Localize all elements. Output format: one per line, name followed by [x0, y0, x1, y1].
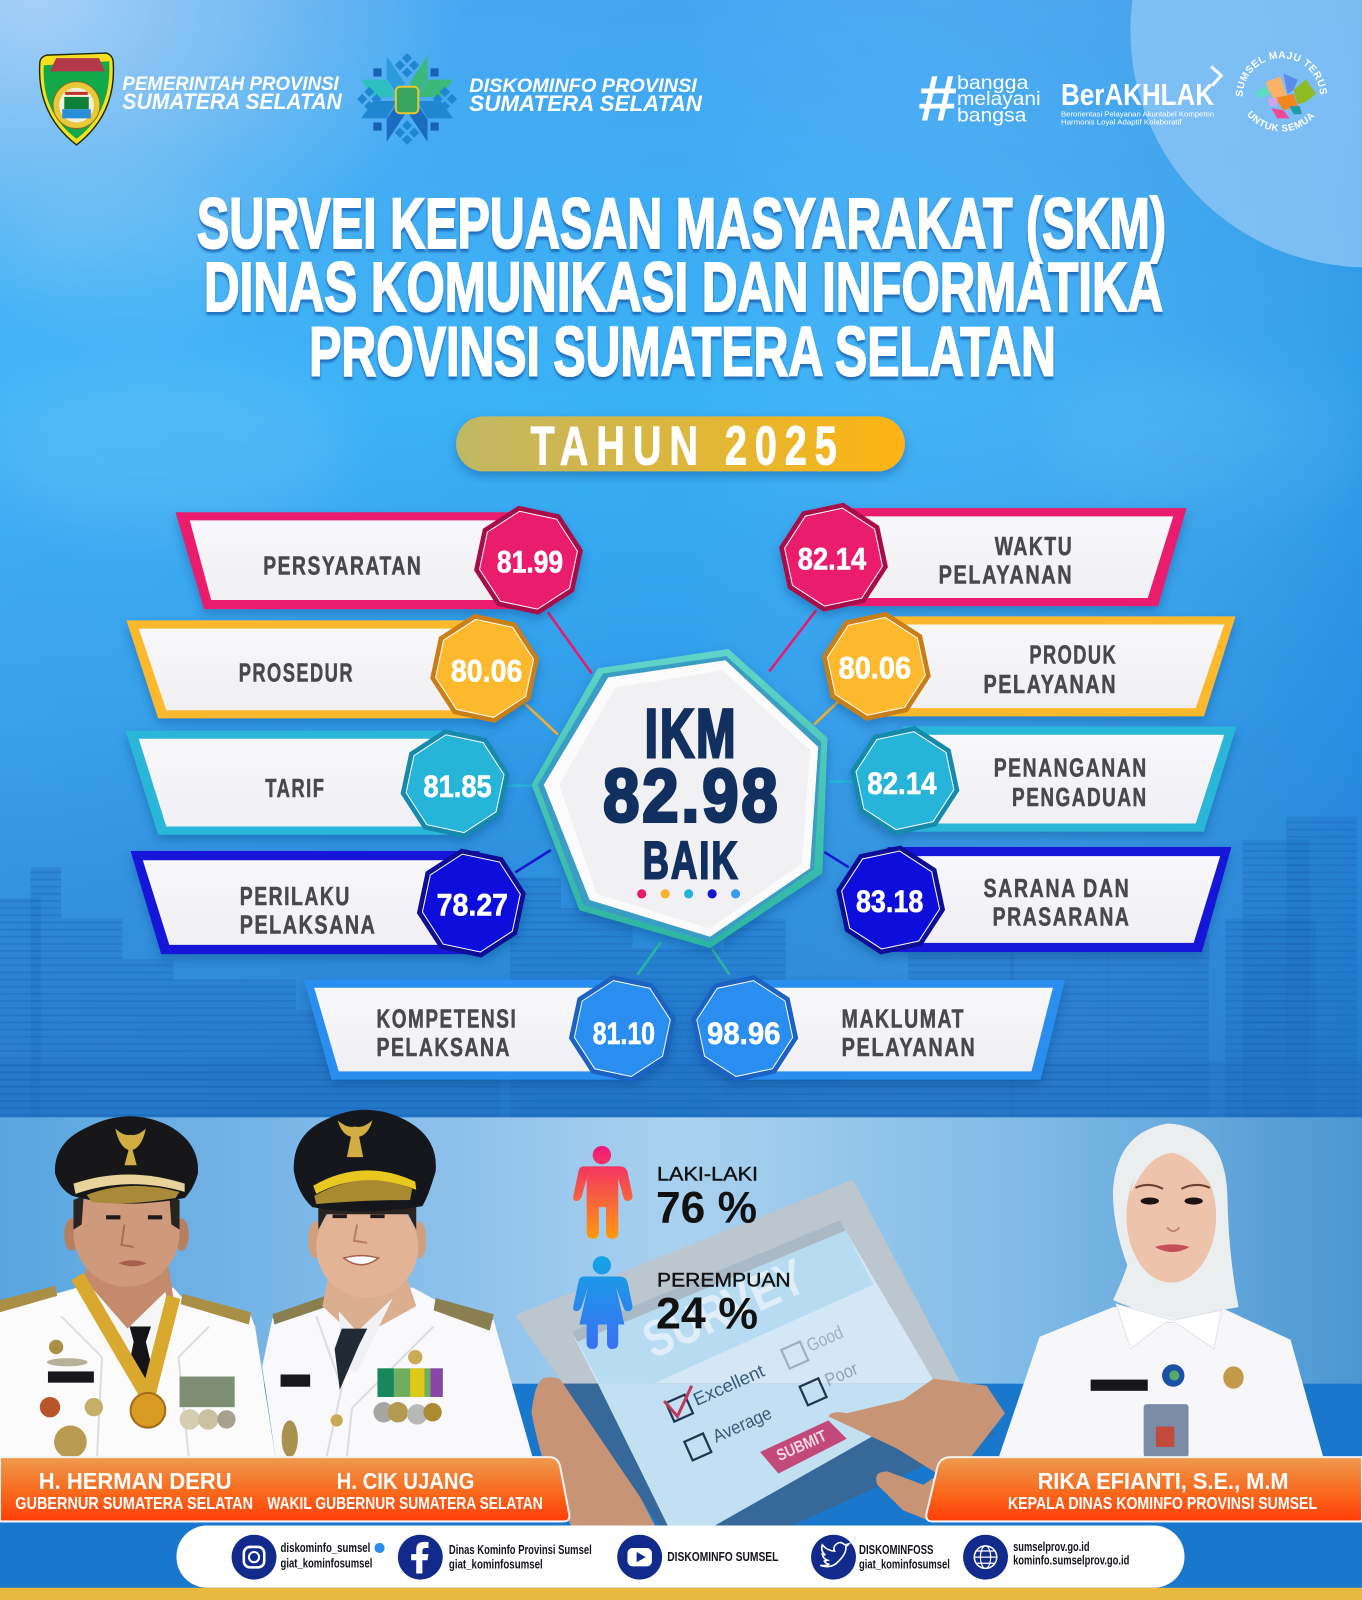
- card: produk pelayanan: 80.06: [839, 650, 911, 686]
- submit label: SUBMIT: [774, 1427, 830, 1465]
- card: sarana dan prasarana: PRASARANA: [993, 904, 1130, 932]
- name banner: left: GUBERNUR SUMATERA SELATAN: [15, 1493, 253, 1513]
- header: provincial text: PEMERINTAH PROVINSI: [122, 73, 339, 95]
- twitter: DISKOMINFOSS: [859, 1542, 934, 1557]
- checkboxes: [666, 1342, 827, 1460]
- instagram: giat_kominfosumsel: [281, 1555, 372, 1570]
- check mark: [664, 1386, 692, 1416]
- portrait: herman deru: [0, 1116, 275, 1458]
- card: perilaku pelaksana: 78.27: [437, 886, 508, 922]
- header: sumsel maju terus emblem: SUMSEL MAJU TERUS: [1236, 51, 1327, 96]
- header: diskominfo text: DISKOMINFO PROVINSI: [469, 75, 697, 97]
- header: bangga melayani bangsa: melayani: [957, 88, 1041, 110]
- option labels: Excellent: [690, 1360, 767, 1410]
- card: tarif: TARIF: [265, 775, 325, 803]
- card: maklumat pelayanan: [685, 969, 1065, 1088]
- survey tablet illustration: [515, 1180, 1005, 1527]
- card: persyaratan: [175, 500, 589, 621]
- right hand: [828, 1379, 1005, 1522]
- tablet rim upper: [515, 1180, 961, 1384]
- lower blue panel: [0, 1117, 1362, 1600]
- year pill: TAHUN 2025: [531, 416, 837, 477]
- year pill: [456, 416, 905, 477]
- card: kompetensi pelaksana: [304, 969, 682, 1088]
- header: diskominfo text: [469, 75, 703, 116]
- bottom stripe: [0, 1588, 1362, 1600]
- card: kompetensi pelaksana: KOMPETENSI: [376, 1006, 517, 1034]
- name banner: left: [0, 1457, 569, 1521]
- tablet rim lower: [563, 1384, 995, 1527]
- option labels: Average: [709, 1402, 775, 1447]
- card: produk pelayanan: PRODUK: [1029, 641, 1117, 669]
- card: penanganan pengaduan: PENANGANAN: [994, 755, 1148, 783]
- card: prosedur: [127, 608, 545, 729]
- header: diskominfo text: SUMATERA SELATAN: [469, 91, 703, 116]
- card: maklumat pelayanan: MAKLUMAT: [842, 1006, 965, 1034]
- website: sumselprov.go.id: [1013, 1539, 1090, 1554]
- card: persyaratan: 81.99: [497, 543, 563, 579]
- card: maklumat pelayanan: 98.96: [707, 1015, 780, 1051]
- card: kompetensi pelaksana: PELAKSANA: [376, 1034, 511, 1062]
- option labels: [690, 1321, 861, 1447]
- connector lines: [507, 610, 855, 974]
- header: BerAKHLAK: Harmonis Loyal Adaptif Kolaboratif: [1061, 118, 1181, 126]
- twitter: [811, 1535, 950, 1580]
- central IKM badge: IKM: [645, 696, 738, 772]
- card: waktu pelayanan: PELAYANAN: [939, 562, 1073, 590]
- instagram: [232, 1535, 385, 1580]
- name banner: right: RIKA EFIANTI, S.E., M.M: [1038, 1468, 1289, 1494]
- translucent band: [0, 1117, 1362, 1384]
- name banner: left: H. CIK UJANG: [337, 1468, 474, 1494]
- name banner: right: [926, 1457, 1362, 1521]
- male figure: [573, 1146, 633, 1239]
- stat: male: LAKI-LAKI: [657, 1164, 758, 1186]
- stat: male: 76 %: [656, 1181, 757, 1232]
- header: diskominfo logo: [357, 53, 457, 145]
- card: sarana dan prasarana: SARANA DAN: [983, 875, 1130, 903]
- card: waktu pelayanan: [773, 496, 1187, 618]
- header: bangga melayani bangsa: bangsa: [957, 104, 1027, 126]
- card: penanganan pengaduan: PENGADUAN: [1012, 784, 1148, 812]
- facebook: [398, 1535, 592, 1580]
- header: logo shield: [40, 53, 113, 145]
- female figure: [573, 1256, 633, 1349]
- instagram: diskominfo_sumsel: [281, 1540, 370, 1555]
- option labels: Poor: [822, 1358, 861, 1390]
- card: maklumat pelayanan: PELAYANAN: [842, 1034, 976, 1062]
- skyline: [0, 816, 1362, 1122]
- card: waktu pelayanan: 82.14: [798, 540, 867, 576]
- card: produk pelayanan: PELAYANAN: [983, 671, 1117, 699]
- card: tarif: 81.85: [423, 768, 492, 804]
- card: persyaratan: PERSYARATAN: [263, 552, 422, 580]
- card: waktu pelayanan: WAKTU: [995, 533, 1073, 561]
- facebook: giat_kominfosumsel: [449, 1556, 543, 1571]
- card: penanganan pengaduan: 82.14: [867, 765, 937, 801]
- option labels: Good: [803, 1321, 846, 1356]
- header: BerAKHLAK: Berorientasi Pelayanan Akuntabel Kompeten: [1061, 110, 1214, 118]
- survey title: [197, 184, 1166, 391]
- header: BerAKHLAK: [1061, 66, 1221, 126]
- screen top bar: [571, 1220, 846, 1342]
- social bar: [176, 1526, 1184, 1588]
- survey word: SURVEY: [634, 1247, 814, 1369]
- card: kompetensi pelaksana: 81.10: [593, 1015, 655, 1051]
- screen header: [577, 1231, 873, 1403]
- central IKM badge: 82.98: [603, 753, 780, 837]
- card: produk pelayanan: [816, 606, 1235, 727]
- submit button: [760, 1420, 847, 1473]
- header: bangga melayani bangsa: bangga: [957, 72, 1029, 94]
- stat: male: [573, 1146, 758, 1239]
- card: perilaku pelaksana: [131, 842, 532, 964]
- header: bangga melayani bangsa: [918, 61, 1041, 134]
- header: provincial text: SUMATERA SELATAN: [122, 89, 343, 114]
- header: sumsel maju terus emblem: UNTUK SEMUA: [1248, 110, 1315, 132]
- central IKM badge: BAIK: [643, 832, 740, 891]
- header: sumsel maju terus emblem: [1236, 51, 1327, 132]
- card: perilaku pelaksana: PERILAKU: [240, 883, 351, 911]
- youtube: DISKOMINFO SUMSEL: [667, 1549, 779, 1564]
- screen lower: [598, 1384, 944, 1527]
- screen upper: [571, 1220, 936, 1384]
- left hand: [532, 1377, 655, 1526]
- header: bangga melayani bangsa: #: [918, 61, 957, 134]
- survey title: PROVINSI SUMATERA SELATAN: [309, 313, 1056, 391]
- name banner: left: H. HERMAN DERU: [39, 1468, 232, 1494]
- header: provincial text: [122, 73, 343, 114]
- card: perilaku pelaksana: PELAKSANA: [240, 912, 376, 940]
- portrait: rika efianti: [999, 1123, 1323, 1457]
- website: [963, 1535, 1129, 1580]
- corner circle: [1130, 0, 1362, 267]
- portrait: cik ujang: [262, 1110, 533, 1457]
- card: tarif: [125, 723, 516, 844]
- card: prosedur: 80.06: [451, 653, 522, 689]
- stat: female: 24 %: [656, 1288, 758, 1339]
- card: sarana dan prasarana: 83.18: [856, 883, 923, 919]
- card: prosedur: PROSEDUR: [239, 660, 354, 688]
- card: sarana dan prasarana: [830, 839, 1231, 961]
- youtube: [617, 1535, 779, 1580]
- stat: female: [573, 1256, 791, 1349]
- header: BerAKHLAK: BerAKHLAK: [1061, 78, 1214, 112]
- twitter: giat_kominfosumsel: [859, 1556, 950, 1571]
- facebook: Dinas Kominfo Provinsi Sumsel: [449, 1542, 592, 1557]
- central IKM badge: [532, 649, 827, 948]
- name banner: left: WAKIL GUBERNUR SUMATERA SELATAN: [267, 1493, 543, 1513]
- website: kominfo.sumselprov.go.id: [1013, 1552, 1129, 1567]
- card: penanganan pengaduan: [844, 720, 1237, 841]
- stat: female: PEREMPUAN: [657, 1270, 791, 1292]
